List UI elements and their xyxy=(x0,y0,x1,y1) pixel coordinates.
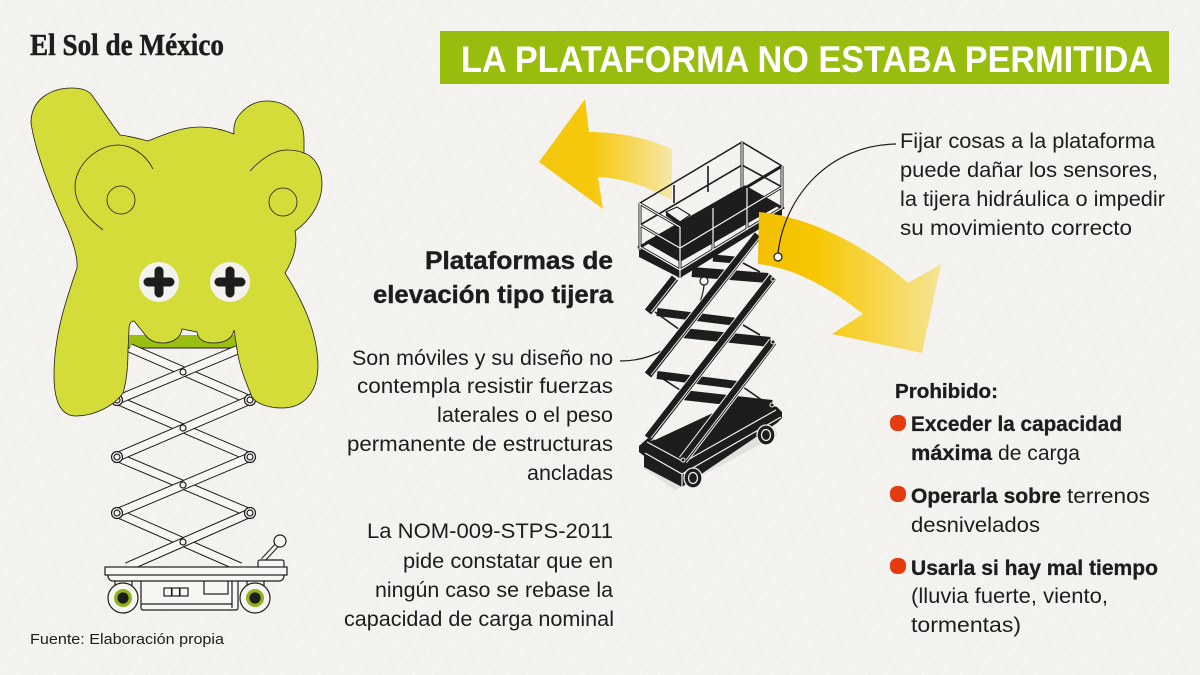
arrow: left sideways force xyxy=(539,99,672,209)
text: platform warning xyxy=(900,130,1165,240)
platform basket xyxy=(639,142,782,278)
item: mal tiempo: tormentas) xyxy=(911,614,1021,637)
text: design limits: permanente de estructuras xyxy=(347,433,613,456)
text: design limits xyxy=(347,347,613,485)
text: norm reference: pide constatar que en xyxy=(403,550,613,573)
text: norm reference: La NOM-009-STPS-2011 xyxy=(367,520,613,543)
text: norm reference xyxy=(344,520,614,631)
arrow: right sideways force xyxy=(758,212,941,353)
heading: plataformas de elevación: Plataformas de xyxy=(425,247,613,275)
item: terrenos desnivelados: desnivelados xyxy=(911,514,1040,537)
item: terrenos desnivelados: terrenos xyxy=(1067,485,1150,508)
text: design limits: laterales o el peso xyxy=(437,404,613,427)
illustration: isometric scissor lift xyxy=(620,142,782,490)
item: exceder capacidad: Exceder la capacidad xyxy=(911,413,1122,436)
item: terrenos desnivelados: Operarla sobre xyxy=(911,485,1061,508)
item: mal tiempo: (lluvia fuerte, viento, xyxy=(911,585,1108,608)
platform control box xyxy=(666,207,690,226)
item: mal tiempo xyxy=(890,557,1158,637)
scissor arms xyxy=(112,348,256,567)
text: platform warning: la tijera hidráulica o impedir xyxy=(900,188,1165,211)
item: exceder capacidad: máxima xyxy=(911,442,992,465)
text: platform warning: puede dañar los sensores, xyxy=(900,159,1158,182)
source note: Fuente: Elaboración propia xyxy=(30,631,225,648)
list heading: Prohibido: xyxy=(895,381,998,403)
text: design limits: Son móviles y su diseño no xyxy=(352,347,613,370)
logo: El Sol de México: El Sol de México xyxy=(30,27,224,62)
callout leader: platform attachments xyxy=(774,144,896,261)
text: platform warning: su movimiento correcto xyxy=(900,217,1132,240)
text: design limits: ancladas xyxy=(527,462,613,485)
callout leader: lateral forces xyxy=(620,277,708,361)
heading: plataformas de elevación xyxy=(373,247,614,309)
heading: plataformas de elevación: elevación tipo tijera xyxy=(373,281,614,309)
text: platform warning: Fijar cosas a la plataforma xyxy=(900,130,1155,153)
floor shadow xyxy=(643,427,778,490)
illustration: scissor lift held by green creature xyxy=(31,88,322,613)
item: terrenos desnivelados xyxy=(890,485,1150,537)
title banner: LA PLATAFORMA NO ESTABA PERMITIDA xyxy=(461,39,1153,80)
scissor lift platform xyxy=(128,331,238,348)
item: exceder capacidad: de carga xyxy=(998,442,1080,465)
lift base with wheels and joystick xyxy=(105,535,287,613)
list: prohibido xyxy=(890,381,1158,637)
text: norm reference: ningún caso se rebase la xyxy=(375,579,613,602)
text: norm reference: capacidad de carga nominal xyxy=(344,608,614,631)
chassis xyxy=(639,398,782,488)
scissor bars xyxy=(648,235,775,462)
cross members xyxy=(655,258,772,407)
green creature xyxy=(31,88,322,416)
item: mal tiempo: Usarla si hay mal tiempo xyxy=(911,557,1158,580)
item: exceder capacidad xyxy=(890,413,1122,465)
text: design limits: contempla resistir fuerzas xyxy=(357,375,613,398)
